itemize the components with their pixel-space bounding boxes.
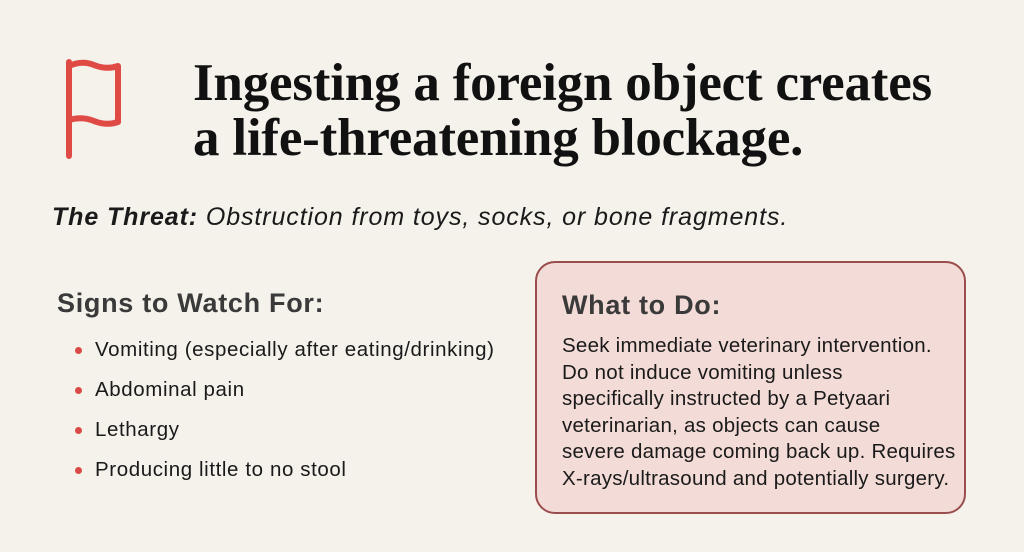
signs list: Vomiting (especially after eating/drinking) bbox=[95, 338, 495, 361]
title bbox=[193, 54, 932, 167]
signs heading: Signs to Watch For: bbox=[57, 288, 324, 318]
what to do body: veterinarian, as objects can cause bbox=[562, 414, 880, 436]
panel: signs bbox=[57, 288, 495, 481]
what to do body: Do not induce vomiting unless bbox=[562, 360, 843, 384]
icon: red flag bbox=[66, 59, 121, 159]
signs list bbox=[75, 338, 495, 481]
panel: what to do bbox=[535, 261, 966, 514]
what to do heading: What to Do: bbox=[562, 290, 721, 320]
what to do body: specifically instructed by a Petyaari bbox=[562, 387, 890, 410]
signs list: Lethargy bbox=[95, 418, 180, 441]
what to do body: Seek immediate veterinary intervention. bbox=[562, 334, 932, 357]
signs list: Producing little to no stool bbox=[95, 458, 347, 481]
title: Ingesting a foreign object creates bbox=[193, 54, 932, 112]
title: a life-threatening blockage. bbox=[193, 109, 803, 167]
what to do body: X-rays/ultrasound and potentially surgery. bbox=[562, 466, 949, 490]
threat text: The Threat: Obstruction from toys, socks, or bone fragments. bbox=[52, 203, 788, 231]
what to do body: severe damage coming back up. Requires bbox=[562, 440, 956, 463]
signs list: Abdominal pain bbox=[95, 378, 245, 401]
what to do body bbox=[562, 334, 956, 490]
